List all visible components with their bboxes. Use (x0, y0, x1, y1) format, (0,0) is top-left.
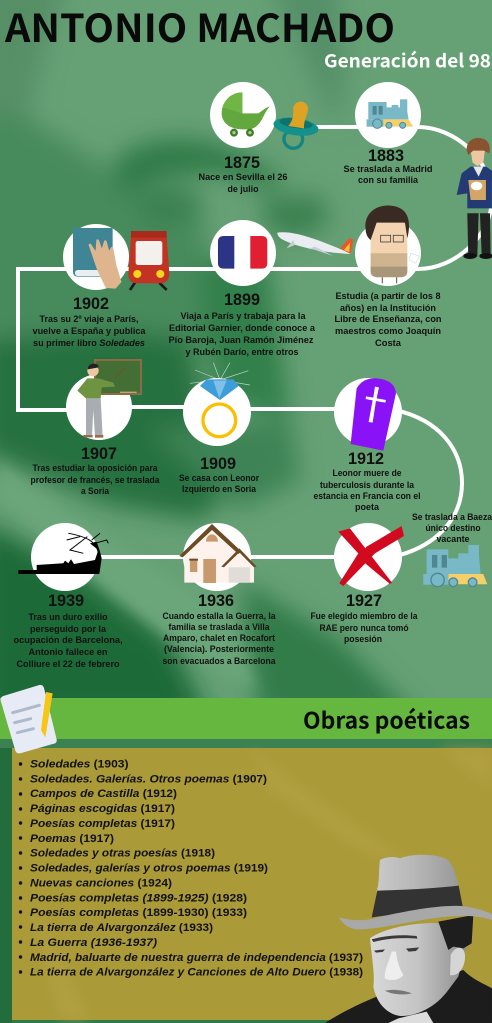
icon: train 1912 to Baeza (423, 545, 487, 587)
icon: diamond ring (190, 363, 250, 437)
text: 1883 (344, 164, 432, 185)
text: 1902: su primer libro Soledades (33, 338, 145, 348)
text: 1902 (32, 314, 146, 348)
years: 1875 (224, 154, 260, 172)
text: 1939: Colliure el 22 de febrero (16, 659, 120, 669)
heading band: Obras poéticas: Obras poéticas (303, 704, 470, 736)
years: 1936 (198, 592, 234, 610)
icon: baby pram (222, 92, 270, 137)
text: 1936 (162, 611, 276, 666)
panel: works list: Soledades, galerías y otros poemas (1919) (30, 863, 268, 875)
text: 1902: vuelve a España y publica (32, 326, 146, 336)
icon: French flag (218, 236, 267, 269)
timeline path (18, 127, 492, 557)
panel: works list: La tierra de Alvargonzález y Canciones de Alto Duero (1938) (30, 967, 363, 979)
text: Baeza: único destino (426, 523, 481, 533)
panel: works list: Nuevas canciones (1924) (30, 878, 172, 890)
panel: works list: Páginas escogidas (1917) (30, 803, 175, 815)
years: 1939 (48, 592, 84, 610)
text: 1883: Se traslada a Madrid (344, 164, 432, 174)
text: 1902: Tras su 2º viaje a París, (40, 314, 138, 324)
text: 1936: Amparo, chalet en Rocafort (163, 633, 275, 643)
icon: purple coffin with cross (351, 378, 396, 451)
text: 1909: Se casa con Leonor (179, 473, 259, 483)
panel: works list: La Guerra (1936-1937) (30, 937, 157, 949)
text: 1912: estancia en Francia con el (314, 491, 420, 501)
icon: pacifier (272, 102, 320, 148)
text: 1939: ocupación de Barcelona, (14, 635, 122, 645)
icon: airplane (277, 232, 353, 256)
text: 1936: son evacuados a Barcelona (162, 656, 276, 666)
icon: red tram (128, 231, 169, 290)
text: 1927: Fue elegido miembro de la (310, 611, 418, 621)
years: 1899 (224, 291, 260, 309)
text: 1909: Izquierdo en Soria (182, 484, 257, 494)
portrait: Machado with hat (325, 855, 492, 1023)
panel: works list: Soledades. Galerías. Otros poemas (1907) (30, 773, 267, 785)
text: Estudia: Libre de Enseñanza, con (334, 314, 442, 324)
years (48, 147, 404, 610)
text: Baeza (412, 512, 492, 544)
years: 1927 (346, 592, 382, 610)
icon: red cross (338, 526, 404, 586)
icon: house (179, 524, 257, 583)
years: 1909 (200, 455, 236, 473)
panel: works list: Poemas (1917) (30, 833, 114, 845)
text: 1927: posesión (344, 634, 382, 644)
icon: teacher at blackboard (77, 360, 141, 438)
icon: book and hand (73, 228, 120, 287)
years: 1907 (81, 445, 117, 463)
text: 1939 (14, 612, 122, 669)
years: 1902 (73, 295, 109, 313)
heading band: Obras poéticas (0, 698, 492, 739)
icon: schoolboy with glasses (365, 206, 419, 283)
text: Baeza: vacante (436, 534, 470, 544)
text: 1899: Editorial Garnier, donde conoce a (169, 323, 316, 333)
text: 1936: (Valencia). Posteriormente (164, 644, 274, 654)
text: Estudia: Estudia (a partir de los 8 (336, 291, 440, 301)
text: 1907: a Soria (81, 486, 110, 496)
icon: note page and pencil (1, 685, 57, 753)
text: 1875: de julio (228, 184, 259, 194)
text: 1927 (310, 611, 418, 644)
text: 1939: perseguido por la (30, 624, 107, 634)
panel: works list: Poesías completas (1899-1930) (1933) (30, 907, 247, 919)
text: 1912: Leonor muere de (332, 468, 402, 478)
text: 1907: Tras estudiar la oposición para (32, 463, 158, 473)
text: 1936: familia se traslada a Villa (168, 622, 270, 632)
text: Estudia: Costa (375, 338, 402, 348)
text: 1875 (198, 172, 288, 194)
panel: works list (12, 748, 492, 1020)
panel: works list: Poesías completas (1899-1925) (1928) (30, 892, 247, 904)
panel: works list: La tierra de Alvargonzález (1933) (30, 922, 213, 934)
panel: works list: Campos de Castilla (1912) (30, 788, 177, 800)
years: 1883 (368, 147, 404, 165)
panel: works list: Madrid, baluarte de nuestra guerra de independencia (1937) (30, 952, 363, 964)
text: 1899: Pío Baroja, Juan Ramón Jiménez (168, 335, 314, 345)
text: Estudia: años) en la Institución (340, 303, 436, 313)
years: 1912 (348, 450, 384, 468)
text: 1899 (168, 311, 316, 357)
text: 1939: Antonio fallece en (28, 647, 108, 657)
text: Estudia: maestros como Joaquín (335, 326, 441, 336)
text: 1912: tuberculosis durante la (320, 480, 415, 490)
icon: tree and boat silhouette (18, 533, 108, 574)
subtitle: Generación del 98 (324, 48, 491, 74)
milestone circles (31, 82, 421, 591)
icon: student boy (457, 138, 492, 259)
panel: works list: Soledades (1903) (30, 758, 129, 770)
panel: works list: Poesías completas (1917) (30, 818, 175, 830)
text: 1899: y Rubén Darío, entre otros (186, 347, 298, 357)
icon: train 1883 (367, 99, 413, 128)
text: 1927: RAE pero nunca tomó (320, 623, 409, 633)
text: 1907: profesor de francés, se traslada (30, 475, 160, 485)
text: 1909 (179, 473, 259, 494)
text: 1875: Nace en Sevilla el 26 (198, 172, 288, 182)
text: 1912: poeta (355, 502, 380, 512)
text: 1907 (30, 463, 160, 496)
panel: works list: Soledades y otras poesías (1918) (30, 848, 215, 860)
text: 1936: Cuando estalla la Guerra, la (162, 611, 276, 621)
text: Estudia (334, 291, 442, 348)
text: 1912 (314, 468, 420, 512)
text: 1939: Tras un duro exilio (28, 612, 108, 622)
text: 1883: con su familia (358, 175, 419, 185)
text: 1899: Viaja a París y trabaja para la (180, 311, 306, 321)
